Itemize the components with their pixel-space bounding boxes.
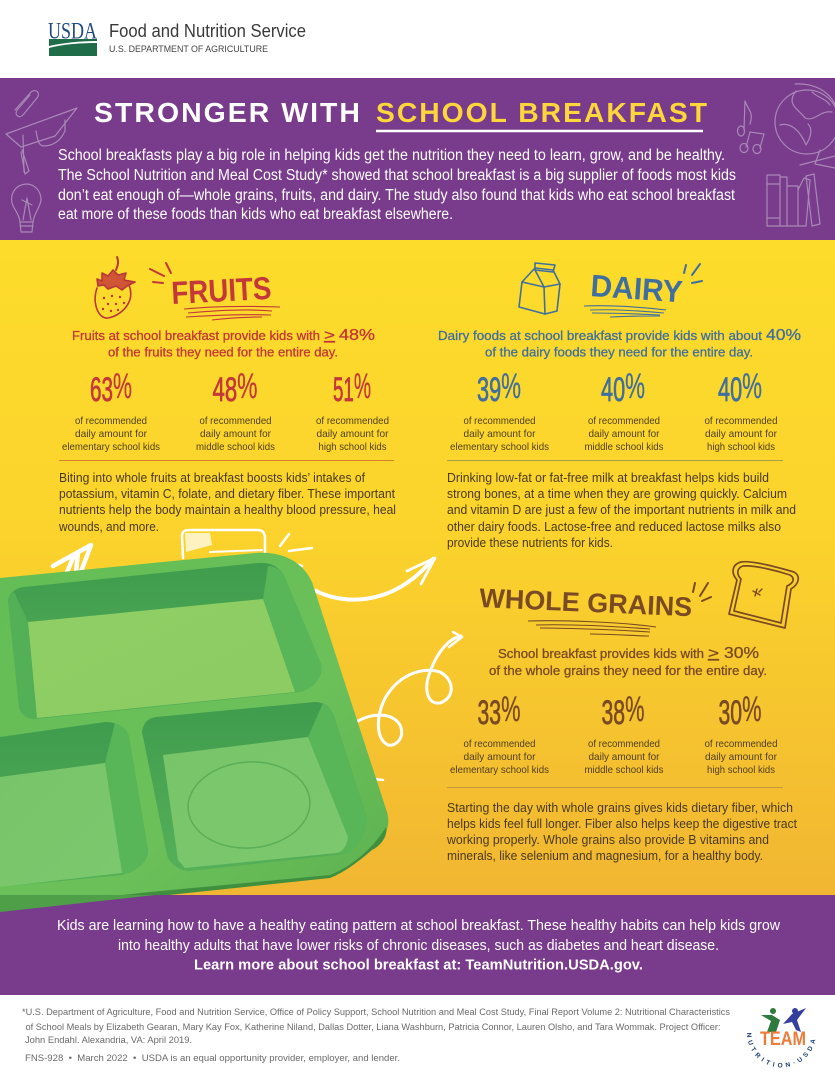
fruits summary: > [324, 327, 335, 344]
icon: books [767, 174, 820, 226]
department name: U.S. DEPARTMENT OF AGRICULTURE [109, 44, 268, 55]
fruits paragraph [58, 470, 396, 534]
captions: whole grains: of recommended [588, 738, 660, 750]
section: whole grains [446, 562, 798, 863]
whole grains paragraph [446, 800, 797, 863]
closing text: Kids are learning how to have a healthy eating pattern at school breakfast. These healthy habits can help kids grow [57, 917, 780, 934]
intro text: eat more of these foods than kids who eat breakfast elsewhere. [58, 206, 453, 223]
stats: whole grains: 38 [602, 694, 639, 732]
dairy paragraph: other dairy foods. Lactose-free and reduced lactose milks also [447, 519, 781, 534]
stats: dairy: % [501, 367, 521, 406]
white doodles behind tray [53, 530, 462, 780]
fruits summary [72, 327, 375, 360]
fruits summary: Fruits at school breakfast provide kids with [72, 328, 320, 343]
captions: fruits: middle school kids [196, 441, 275, 453]
stats: whole grains [478, 690, 762, 732]
stats: whole grains: % [742, 690, 762, 729]
stats: whole grains: 33 [478, 694, 515, 732]
section: fruits [58, 257, 396, 534]
molded circle [185, 758, 313, 852]
heading: whole grains: WHOLE GRAINS [479, 583, 693, 622]
captions: dairy: elementary school kids [450, 441, 549, 453]
rays [693, 583, 711, 601]
captions: dairy: of recommended [704, 415, 778, 427]
heading: fruits: FRUITS [170, 270, 272, 311]
title highlight: SCHOOL BREAKFAST [376, 97, 709, 128]
tray corner overlap [0, 895, 155, 912]
icon: light bulb [12, 184, 41, 232]
heading: dairy: DAIRY [590, 268, 684, 309]
fruits paragraph: Biting into whole fruits at breakfast boosts kids’ intakes of [59, 470, 365, 485]
whole grains summary: 30% [724, 645, 759, 662]
arrow: curved to dairy [316, 558, 435, 600]
icon: paperclip [15, 91, 38, 117]
dairy paragraph: and vitamin D are just a few of the important nutrients in milk and [447, 502, 796, 517]
captions: fruits: of recommended [200, 415, 272, 427]
stats: fruits: % [354, 367, 371, 406]
agency name: Food and Nutrition Service [109, 20, 306, 41]
captions: whole grains: daily amount for [464, 751, 536, 763]
stats: dairy: % [625, 367, 645, 406]
tray body [0, 553, 388, 911]
bottom left compartment [0, 722, 148, 887]
captions: dairy: high school kids [707, 441, 775, 453]
banner background [0, 895, 835, 995]
intro text: School breakfasts play a big role in helping kids get the nutrition they need to learn, grow, and be healthy. [58, 147, 725, 164]
panel: purple closing banner [0, 895, 835, 995]
whole grains summary: School breakfast provides kids with [498, 646, 704, 661]
icon: globe [775, 84, 835, 168]
stats: whole grains: 30 [718, 694, 756, 732]
whole grains paragraph: helps kids feel full longer. Fiber also helps keep the digestive tract [447, 816, 797, 831]
dairy paragraph: Drinking low-fat or fat-free milk at breakfast helps kids build [447, 470, 769, 485]
captions: dairy: daily amount for [464, 428, 536, 440]
captions: fruits: of recommended [316, 415, 389, 427]
dairy summary: Dairy foods at school breakfast provide kids with about [438, 328, 762, 343]
team wordmark: TEAM [760, 1029, 806, 1050]
scribble underline [184, 306, 280, 320]
captions: fruits: high school kids [318, 441, 386, 453]
intro text [58, 147, 736, 223]
fruits paragraph: wounds, and more. [58, 519, 159, 534]
stats: dairy: 40 [601, 371, 639, 409]
icon: music notes [738, 101, 764, 154]
publication line: FNS-928 • March 2022 • USDA is an equal opportunity provider, employer, and lender. [25, 1052, 400, 1063]
stats: dairy: % [742, 367, 762, 406]
stats: fruits: 63 [90, 371, 128, 409]
captions: fruits: daily amount for [316, 428, 389, 440]
lunch tray [0, 553, 388, 912]
scribble underline [584, 306, 666, 317]
doodle: white bread sketch [182, 530, 265, 558]
title: STRONGER WITH [94, 97, 362, 128]
rays [280, 534, 312, 566]
whole grains paragraph: minerals, like selenium and magnesium, for a healthy body. [447, 848, 763, 863]
stats: fruits: 48 [212, 371, 250, 409]
icon: graduation cap [6, 108, 77, 174]
rays [150, 263, 171, 283]
intro text: don’t eat enough of—whole grains, fruits, and dairy. The study also found that kids who eat school breakfast [58, 187, 736, 204]
stats: dairy: 40 [718, 371, 756, 409]
captions: dairy: middle school kids [584, 441, 664, 453]
icon: milk carton [519, 263, 560, 314]
stats: fruits [90, 367, 371, 409]
captions: dairy: of recommended [464, 415, 536, 427]
captions: whole grains: high school kids [707, 764, 775, 776]
bottom right compartment [142, 702, 366, 871]
fruits summary: of the fruits they need for the entire day. [108, 344, 338, 360]
closing text: Learn more about school breakfast at: TeamNutrition.USDA.gov. [194, 956, 643, 974]
captions: dairy: of recommended [588, 415, 660, 427]
tray lower edge shadow [0, 827, 386, 912]
stats: dairy: 39 [477, 371, 515, 409]
footnote: of School Meals by Elizabeth Gearan, Mary Kay Fox, Katherine Niland, Dallas Dotter, Liana Washburn, Patricia Connor, Lauren Olsho, and Tara Wommak. Project Officer: [26, 1021, 720, 1032]
captions: whole grains: middle school kids [584, 764, 664, 776]
divider [447, 460, 783, 462]
fruits paragraph: nutrients help the body maintain a healthy blood pressure, heal [59, 502, 396, 517]
top compartment [8, 563, 322, 719]
dairy summary: 40% [766, 327, 801, 344]
captions: dairy: daily amount for [588, 428, 660, 440]
header: USDA logo and agency name [48, 18, 306, 56]
arrow: up left [53, 545, 91, 577]
icon: bread slice [729, 562, 798, 628]
dairy paragraph: strong bones, at a time when they are growing quickly. Calcium [447, 486, 787, 501]
whole grains summary: > [708, 645, 719, 662]
fruits summary: 48% [339, 327, 375, 344]
stats: fruits: 51 [333, 371, 371, 409]
USDA logo: USDA [48, 18, 97, 44]
captions: fruits: of recommended [75, 415, 147, 427]
captions: fruits: elementary school kids [62, 441, 160, 453]
divider [447, 786, 783, 788]
fruits paragraph: potassium, vitamin C, folate, and dietary fiber. These important [59, 486, 395, 501]
captions: whole grains: of recommended [704, 738, 778, 750]
section: dairy [438, 263, 801, 550]
footnote [22, 1006, 730, 1045]
USDA logo [48, 18, 97, 56]
intro text: The School Nutrition and Meal Cost Study* showed that school breakfast is a big supplier of foods most kids [58, 167, 736, 184]
footer [22, 1006, 816, 1068]
blue figure [783, 1008, 806, 1032]
captions: fruits: daily amount for [200, 428, 271, 440]
captions: whole grains: elementary school kids [450, 764, 549, 776]
footnote: John Endahl. Alexandria, VA: April 2019. [25, 1034, 192, 1045]
captions: fruits: daily amount for [75, 428, 147, 440]
closing text: into healthy adults that have lower risks of chronic diseases, such as diabetes and heart disease. [118, 937, 719, 954]
closing text [57, 917, 780, 974]
circular wordmark: NUTRITION·USDA [746, 1032, 816, 1068]
banner background [0, 78, 835, 240]
dairy paragraph [447, 470, 796, 550]
scribble underline [528, 621, 656, 636]
green figure [761, 1008, 780, 1032]
rays [684, 264, 702, 283]
whole grains summary: of the whole grains they need for the entire day. [489, 663, 767, 678]
arrow: looped to whole grains [358, 632, 462, 745]
stats: dairy [477, 367, 762, 409]
captions: fruits [62, 415, 389, 453]
title underline [376, 130, 703, 132]
footnote: *U.S. Department of Agriculture, Food and Nutrition Service, Office of Policy Support, School Nutrition and Meal Cost Study, Final Report Volume 2: Nutritional Characteristics [22, 1006, 730, 1017]
stats: fruits: % [237, 367, 258, 406]
divider [59, 460, 394, 462]
dairy paragraph: provide these nutrients for kids. [447, 535, 613, 550]
icon: Team Nutrition logo [746, 1008, 816, 1068]
doodle fragment [374, 779, 383, 780]
yellow background [0, 240, 835, 895]
dairy summary: of the dairy foods they need for the entire day. [485, 344, 753, 360]
whole grains paragraph: Starting the day with whole grains gives kids dietary fiber, which [447, 800, 793, 815]
captions: whole grains: daily amount for [588, 751, 660, 763]
stats: whole grains: % [501, 690, 520, 729]
captions: dairy [450, 415, 778, 453]
whole grains paragraph: working properly. Whole grains also provide B vitamins and [446, 832, 769, 847]
stats: whole grains: % [625, 690, 644, 729]
icon: strawberry [95, 257, 135, 318]
captions: whole grains: daily amount for [705, 751, 777, 763]
captions: dairy: daily amount for [705, 428, 777, 440]
dairy summary [438, 327, 801, 360]
captions: whole grains: of recommended [464, 738, 536, 750]
stats: fruits: % [113, 367, 132, 406]
captions: whole grains [450, 738, 778, 776]
whole grains summary [489, 645, 767, 678]
panel: purple intro banner [0, 78, 835, 240]
